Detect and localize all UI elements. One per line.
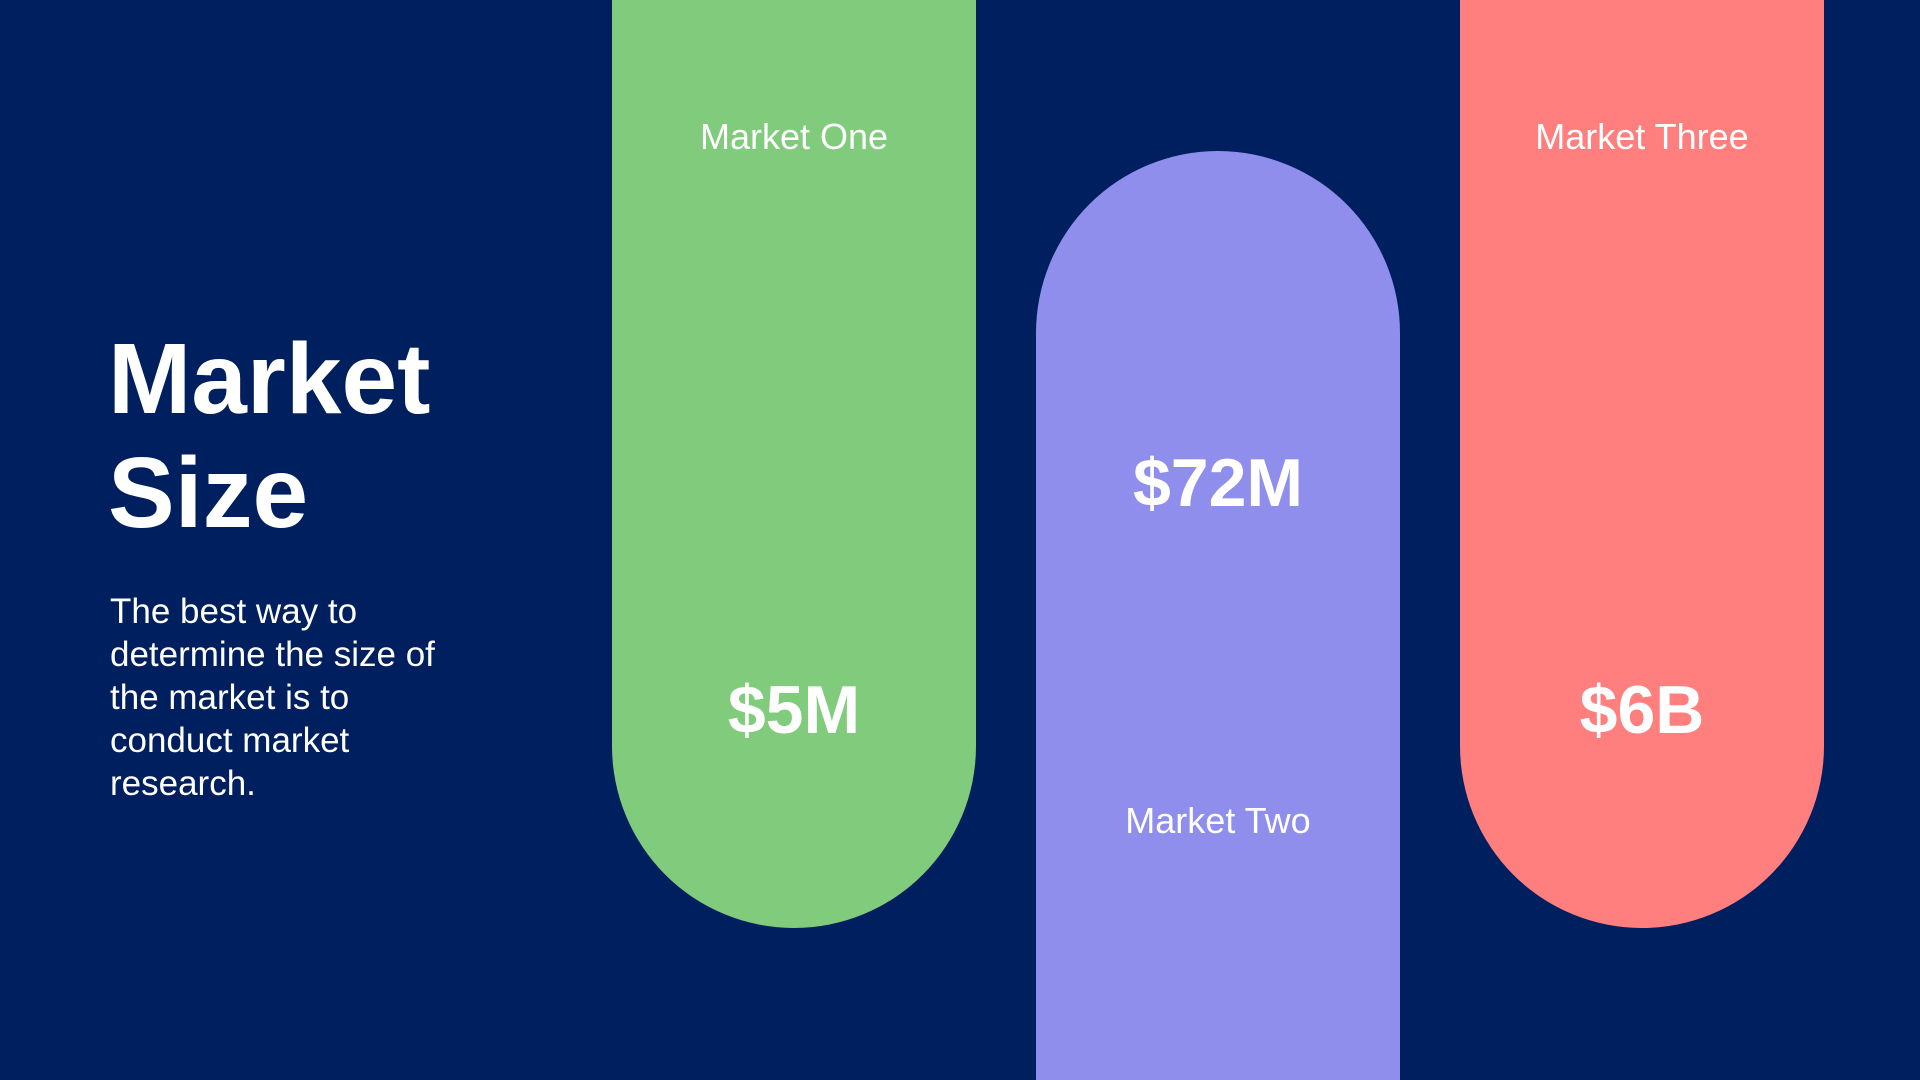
description text: research.: [110, 764, 256, 803]
description text: [110, 592, 435, 803]
panel: market two: [1036, 151, 1400, 1080]
value: $5M: $5M: [728, 672, 860, 748]
title: Size: [108, 437, 308, 549]
value: $6B: $6B: [1580, 672, 1704, 748]
description text: conduct market: [110, 721, 349, 760]
description text: determine the size of: [110, 635, 435, 674]
label: market three: Market Three: [1535, 116, 1749, 157]
panel: market one: [612, 0, 976, 928]
label: market one: Market One: [700, 116, 888, 157]
description text: the market is to: [110, 678, 349, 717]
title: Market: [108, 323, 430, 435]
panel: market three: [1460, 0, 1824, 928]
label: market two: Market Two: [1125, 800, 1311, 841]
value: $72M: $72M: [1133, 445, 1303, 521]
title: [108, 323, 430, 549]
description text: The best way to: [110, 592, 357, 631]
